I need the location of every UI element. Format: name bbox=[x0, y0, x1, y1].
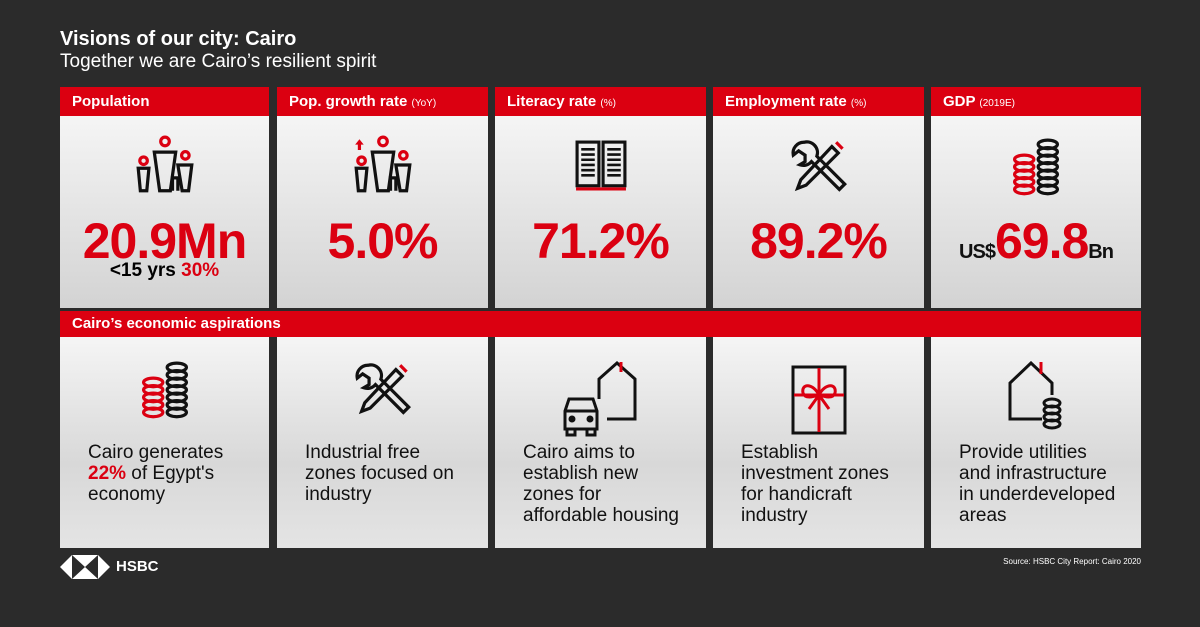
text: utilities: Provide utilities bbox=[959, 442, 1087, 463]
logo: HSBC bbox=[60, 555, 159, 579]
text: housing: establish new bbox=[523, 463, 638, 484]
header: population bbox=[60, 87, 269, 116]
note: under 15: <15 yrs 30% bbox=[110, 260, 219, 281]
text: industrial: zones focused on bbox=[305, 463, 454, 484]
text: industrial: Industrial free bbox=[305, 442, 420, 463]
text: economy: 22% of Egypt's bbox=[88, 463, 214, 484]
subtitle: Together we are Cairo’s resilient spirit bbox=[60, 51, 376, 72]
panel: housing bbox=[495, 337, 706, 548]
value: 20.9Mn: 20.9Mn bbox=[83, 213, 246, 269]
header: growth bbox=[277, 87, 488, 116]
header: employment bbox=[713, 87, 924, 116]
panel: employment bbox=[713, 87, 924, 308]
text: handicraft: for handicraft bbox=[741, 484, 852, 505]
icon: house and car bbox=[564, 361, 636, 436]
icon: tools bbox=[355, 363, 411, 415]
header: literacy: Literacy rate (%) bbox=[507, 93, 616, 110]
panel: literacy bbox=[495, 87, 706, 308]
text: utilities: areas bbox=[959, 505, 1007, 526]
text: handicraft: investment zones bbox=[741, 463, 889, 484]
text: utilities bbox=[959, 442, 1115, 526]
icon: people bbox=[136, 136, 194, 192]
value: 5.0%: 5.0% bbox=[328, 213, 437, 269]
text: handicraft: industry bbox=[741, 505, 808, 526]
banner: economic aspirations bbox=[60, 311, 1141, 337]
text: economy bbox=[88, 442, 223, 505]
icon: gift bbox=[792, 366, 846, 434]
header: literacy bbox=[495, 87, 706, 116]
text: industrial bbox=[305, 442, 454, 505]
icon: coins bbox=[1013, 138, 1059, 196]
panel: utilities bbox=[931, 337, 1141, 548]
icon: tools bbox=[791, 140, 847, 192]
panel: handicraft bbox=[713, 337, 924, 548]
header: GDP: GDP (2019E) bbox=[943, 93, 1015, 110]
banner: economic aspirations: Cairo’s economic aspirations bbox=[72, 315, 281, 332]
panel: economy share bbox=[60, 337, 269, 548]
icon: house and coins bbox=[1008, 361, 1062, 430]
panel: GDP bbox=[931, 87, 1141, 308]
icon: book bbox=[576, 140, 626, 190]
text: handicraft bbox=[741, 442, 889, 526]
text: utilities: in underdeveloped bbox=[959, 484, 1115, 505]
icon: coins bbox=[142, 362, 188, 418]
panel: growth bbox=[277, 87, 488, 308]
text: housing: affordable housing bbox=[523, 505, 679, 526]
text: housing: zones for bbox=[523, 484, 601, 505]
logo: HSBC: HSBC bbox=[116, 558, 159, 575]
text: handicraft: Establish bbox=[741, 442, 818, 463]
value: GDP: US$69.8Bn bbox=[959, 213, 1113, 269]
text: industrial: industry bbox=[305, 484, 372, 505]
header: growth: Pop. growth rate (YoY) bbox=[289, 93, 436, 110]
header: GDP bbox=[931, 87, 1141, 116]
header: employment: Employment rate (%) bbox=[725, 93, 866, 110]
panel: population bbox=[60, 87, 269, 308]
icon: people arrow bbox=[354, 136, 412, 192]
text: utilities: and infrastructure bbox=[959, 463, 1107, 484]
header: population: Population bbox=[72, 93, 150, 110]
panel: industrial zones bbox=[277, 337, 488, 548]
text: housing: Cairo aims to bbox=[523, 442, 635, 463]
value: 89.2%: 89.2% bbox=[750, 213, 887, 269]
source note: Source: HSBC City Report: Cairo 2020 bbox=[1003, 557, 1141, 566]
value: 71.2%: 71.2% bbox=[532, 213, 669, 269]
text: housing bbox=[523, 442, 679, 526]
text: economy: economy bbox=[88, 484, 165, 505]
title: Visions of our city: Cairo bbox=[60, 28, 296, 50]
text: economy: Cairo generates bbox=[88, 442, 223, 463]
